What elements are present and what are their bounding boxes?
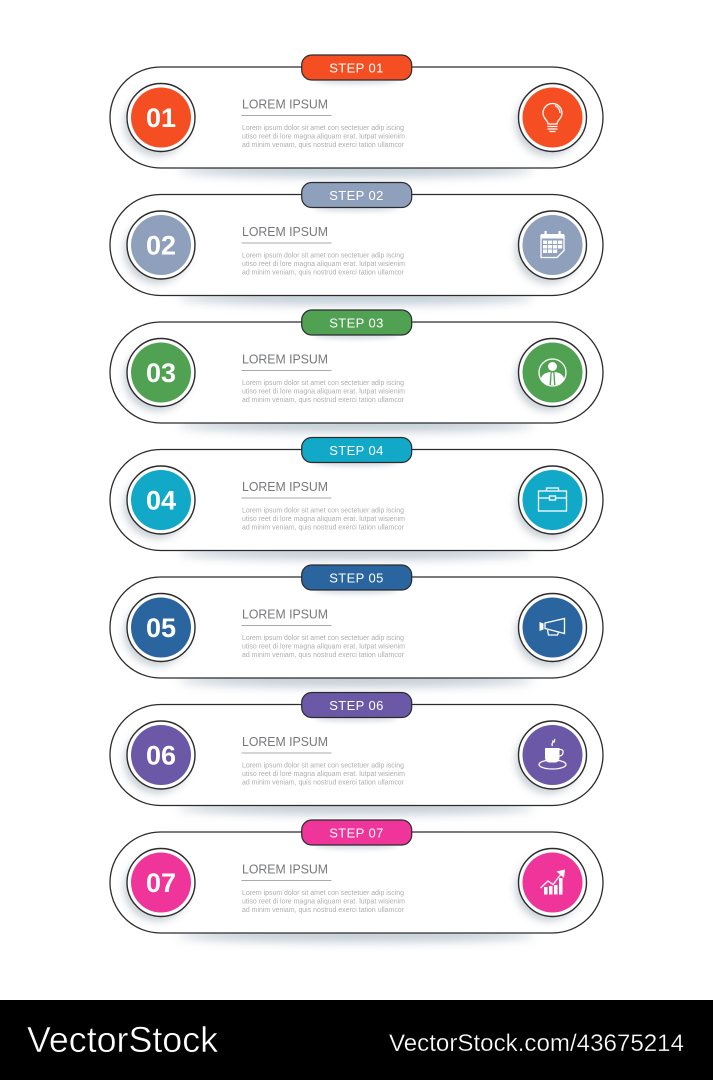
step 03 row (110, 310, 603, 432)
number circle: 05 (146, 613, 176, 643)
text block: utiso reet di lore magna aliquam erat. lutpat wisienim (242, 898, 405, 906)
icon circle: growth chart (516, 848, 586, 921)
text block (242, 862, 405, 914)
panel outline (110, 322, 603, 423)
icon circle: coffee cup (516, 721, 586, 794)
number circle: 06 (146, 740, 176, 770)
text block (242, 606, 405, 659)
footer logo: VectorStock (27, 1019, 219, 1060)
text block: utiso reet di lore magna aliquam erat. lutpat wisienim (242, 771, 405, 778)
step badge: STEP 03 (329, 316, 384, 330)
text block: Lorem ipsum dolor sit amet con sectetuer adip iscing (242, 890, 404, 897)
step 05 row (110, 565, 603, 687)
step badge (302, 55, 412, 80)
number circle: 03 (146, 358, 176, 388)
step badge (302, 820, 412, 845)
text block: ad minim veniam, quis nostrud exerci tation ullamcor (242, 780, 405, 786)
panel outline (110, 194, 603, 296)
text block (242, 224, 405, 276)
text block: LOREM IPSUM (242, 96, 328, 112)
text block: Lorem ipsum dolor sit amet con sectetuer adip iscing (242, 125, 404, 132)
step 04 row (110, 438, 603, 560)
number circle (124, 211, 195, 284)
text block: LOREM IPSUM (242, 352, 328, 366)
text block: ad minim veniam, quis nostrud exerci tation ullamcor (242, 652, 405, 659)
number circle (124, 848, 195, 921)
step 01 row (110, 55, 603, 177)
text block (242, 479, 405, 532)
text block: Lorem ipsum dolor sit amet con sectetuer adip iscing (242, 380, 404, 387)
text block: ad minim veniam, quis nostrud exerci tation ullamcor (242, 397, 405, 404)
panel outline (110, 67, 603, 168)
step 06 row (110, 692, 603, 814)
text block: LOREM IPSUM (242, 734, 328, 749)
text block: Lorem ipsum dolor sit amet con sectetuer adip iscing (242, 635, 404, 642)
footer bar (0, 1000, 713, 1080)
step badge (302, 310, 412, 335)
text block: ad minim veniam, quis nostrud exerci tation ullamcor (242, 907, 405, 914)
step badge: STEP 05 (329, 570, 384, 586)
text block: utiso reet di lore magna aliquam erat. lutpat wisienim (242, 261, 405, 268)
number circle (124, 721, 195, 794)
step badge: STEP 06 (329, 698, 384, 713)
number circle (124, 466, 195, 538)
number circle (124, 338, 195, 411)
text block: ad minim veniam, quis nostrud exerci tation ullamcor (242, 524, 405, 532)
text block: ad minim veniam, quis nostrud exerci tation ullamcor (242, 270, 405, 276)
icon circle: briefcase (516, 466, 586, 538)
number circle: 07 (146, 868, 176, 898)
icon circle: calendar (516, 211, 586, 284)
icon circle: megaphone (516, 594, 586, 666)
step badge (302, 565, 412, 590)
text block: utiso reet di lore magna aliquam erat. lutpat wisienim (242, 644, 405, 650)
panel outline (110, 832, 603, 933)
text block (242, 352, 405, 404)
number circle: 02 (146, 230, 176, 260)
icon circle: light bulb (516, 84, 586, 156)
step badge (302, 438, 412, 462)
step badge (302, 692, 412, 718)
step badge: STEP 01 (329, 60, 384, 76)
icon circle: businessman (516, 338, 586, 411)
step badge: STEP 07 (329, 826, 384, 840)
step badge (302, 182, 412, 208)
step badge: STEP 02 (329, 188, 384, 203)
text block: Lorem ipsum dolor sit amet con sectetuer adip iscing (242, 252, 404, 260)
text block: utiso reet di lore magna aliquam erat. lutpat wisienim (242, 134, 405, 140)
step 07 row (110, 820, 603, 942)
panel outline (110, 450, 603, 550)
text block: LOREM IPSUM (242, 862, 328, 876)
number circle: 01 (146, 103, 176, 133)
panel outline (110, 704, 603, 806)
panel outline (110, 577, 603, 678)
text block: Lorem ipsum dolor sit amet con sectetuer adip iscing (242, 762, 404, 770)
text block (242, 96, 405, 149)
text block: utiso reet di lore magna aliquam erat. lutpat wisienim (242, 388, 405, 396)
step 02 row (110, 182, 603, 304)
text block: ad minim veniam, quis nostrud exerci tation ullamcor (242, 142, 405, 149)
number circle: 04 (146, 486, 176, 516)
step badge: STEP 04 (329, 443, 384, 458)
text block: LOREM IPSUM (242, 606, 328, 622)
number circle (124, 84, 195, 156)
text block: utiso reet di lore magna aliquam erat. lutpat wisienim (242, 516, 405, 523)
text block (242, 734, 405, 786)
text block: LOREM IPSUM (242, 479, 328, 494)
text block: Lorem ipsum dolor sit amet con sectetuer adip iscing (242, 508, 404, 514)
footer url: VectorStock.com/43675214 (389, 1030, 684, 1057)
number circle (124, 594, 195, 666)
text block: LOREM IPSUM (242, 224, 328, 239)
